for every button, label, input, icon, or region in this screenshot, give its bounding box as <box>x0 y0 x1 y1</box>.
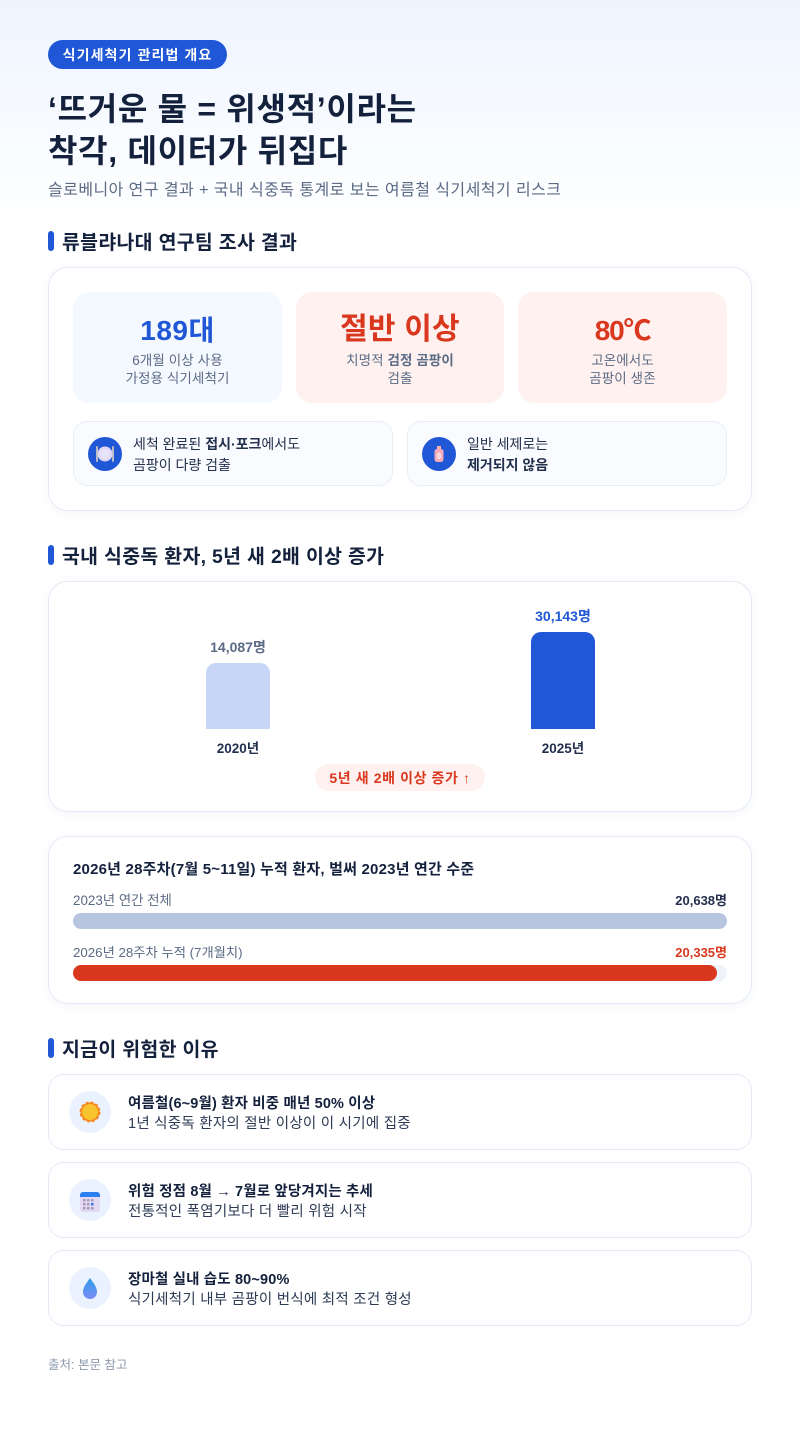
note: plates and forks: 세척 완료된 접시·포크에서도 <box>133 436 300 452</box>
note: plates and forks: 곰팡이 다량 검출 <box>133 457 231 473</box>
bar chart: 2025: 30,143명 <box>535 608 591 624</box>
icon: detergent bottle <box>422 437 456 471</box>
panel: bar chart <box>48 581 752 812</box>
panel: summer share: 1년 식중독 환자의 절반 이상이 이 시기에 집중 <box>128 1116 411 1132</box>
panel: peak shift <box>48 1162 752 1238</box>
section accent: why now <box>48 1038 54 1058</box>
stat: more than half: 검출 <box>387 371 413 386</box>
callout: doubled: 5년 새 2배 이상 증가 ↑ <box>329 770 471 786</box>
bar chart: 2025 <box>531 608 595 756</box>
background gradient <box>0 0 800 230</box>
bar chart: 2020 <box>206 639 270 756</box>
progress bar: 2026 <box>73 965 727 981</box>
note: plates and forks <box>73 421 393 486</box>
bar chart: 2020: 14,087명 <box>210 639 266 655</box>
heading: patients doubled: 국내 식중독 환자, 5년 새 2배 이상 증가 <box>62 546 384 568</box>
stat: 189 dishwashers: 가정용 식기세척기 <box>125 371 230 386</box>
note: detergent <box>407 421 727 486</box>
note: detergent: 제거되지 않음 <box>467 457 548 473</box>
note: detergent: 일반 세제로는 <box>467 436 548 452</box>
bar chart: 2020: 2020년 <box>217 741 259 756</box>
label: 2026: 2026년 28주차 누적 (7개월치) <box>73 945 243 960</box>
value: 2023: 20,638명 <box>675 893 727 908</box>
stat: 189 dishwashers: 189대 <box>140 315 215 346</box>
source note: 출처: 본문 참고 <box>48 1358 127 1372</box>
stat: 189 dishwashers: 6개월 이상 사용 <box>132 353 223 368</box>
panel: peak shift: 위험 정점 8월 → 7월로 앞당겨지는 추세 <box>128 1184 373 1200</box>
panel: summer share <box>48 1074 752 1150</box>
stat: 80 degrees <box>518 292 727 403</box>
title <box>48 91 417 169</box>
section accent: research <box>48 231 54 251</box>
badge: topic pill <box>48 40 227 69</box>
stat: 80 degrees: 고온에서도 <box>591 353 654 368</box>
heading: cumulative comparison: 2026년 28주차(7월 5~11일) 누적 환자, 벌써 2023년 연간 수준 <box>73 861 474 878</box>
title: 착각, 데이터가 뒤집다 <box>48 133 348 169</box>
panel: humidity: 식기세척기 내부 곰팡이 번식에 최적 조건 형성 <box>128 1292 412 1308</box>
value: 2026: 20,335명 <box>675 945 727 960</box>
callout: doubled <box>315 764 485 791</box>
stat: more than half <box>296 292 504 403</box>
icon: calendar <box>69 1179 111 1221</box>
stat: more than half: 치명적 검정 곰팡이 <box>346 353 454 368</box>
badge: topic pill: 식기세척기 관리법 개요 <box>63 47 212 63</box>
panel: summer share: 여름철(6~9월) 환자 비중 매년 50% 이상 <box>128 1096 375 1112</box>
stat: 80 degrees: 80℃ <box>595 315 650 346</box>
panel: cumulative comparison <box>48 836 752 1004</box>
title: ‘뜨거운 물 = 위생적’이라는 <box>48 91 417 127</box>
panel: humidity: 장마철 실내 습도 80~90% <box>128 1272 289 1288</box>
progress bar: 2023 <box>73 913 727 929</box>
icon: sun <box>69 1091 111 1133</box>
stat: more than half: 절반 이상 <box>340 313 460 346</box>
icon: plate and cutlery <box>88 437 122 471</box>
panel: peak shift: 전통적인 폭염기보다 더 빨리 위험 시작 <box>128 1204 367 1220</box>
heading: why now: 지금이 위험한 이유 <box>62 1039 219 1061</box>
label: 2023: 2023년 연간 전체 <box>73 893 172 908</box>
heading: research results: 류블랴나대 연구팀 조사 결과 <box>62 232 297 254</box>
subtitle: 슬로베니아 연구 결과 + 국내 식중독 통계로 보는 여름철 식기세척기 리스크 <box>48 182 561 199</box>
stat: 189 dishwashers <box>73 292 282 403</box>
panel: research results <box>48 267 752 511</box>
bar chart: 2025: 2025년 <box>542 741 584 756</box>
stat: 80 degrees: 곰팡이 생존 <box>589 371 656 386</box>
panel: humidity <box>48 1250 752 1326</box>
icon: water drop <box>69 1267 111 1309</box>
section accent: patients <box>48 545 54 565</box>
